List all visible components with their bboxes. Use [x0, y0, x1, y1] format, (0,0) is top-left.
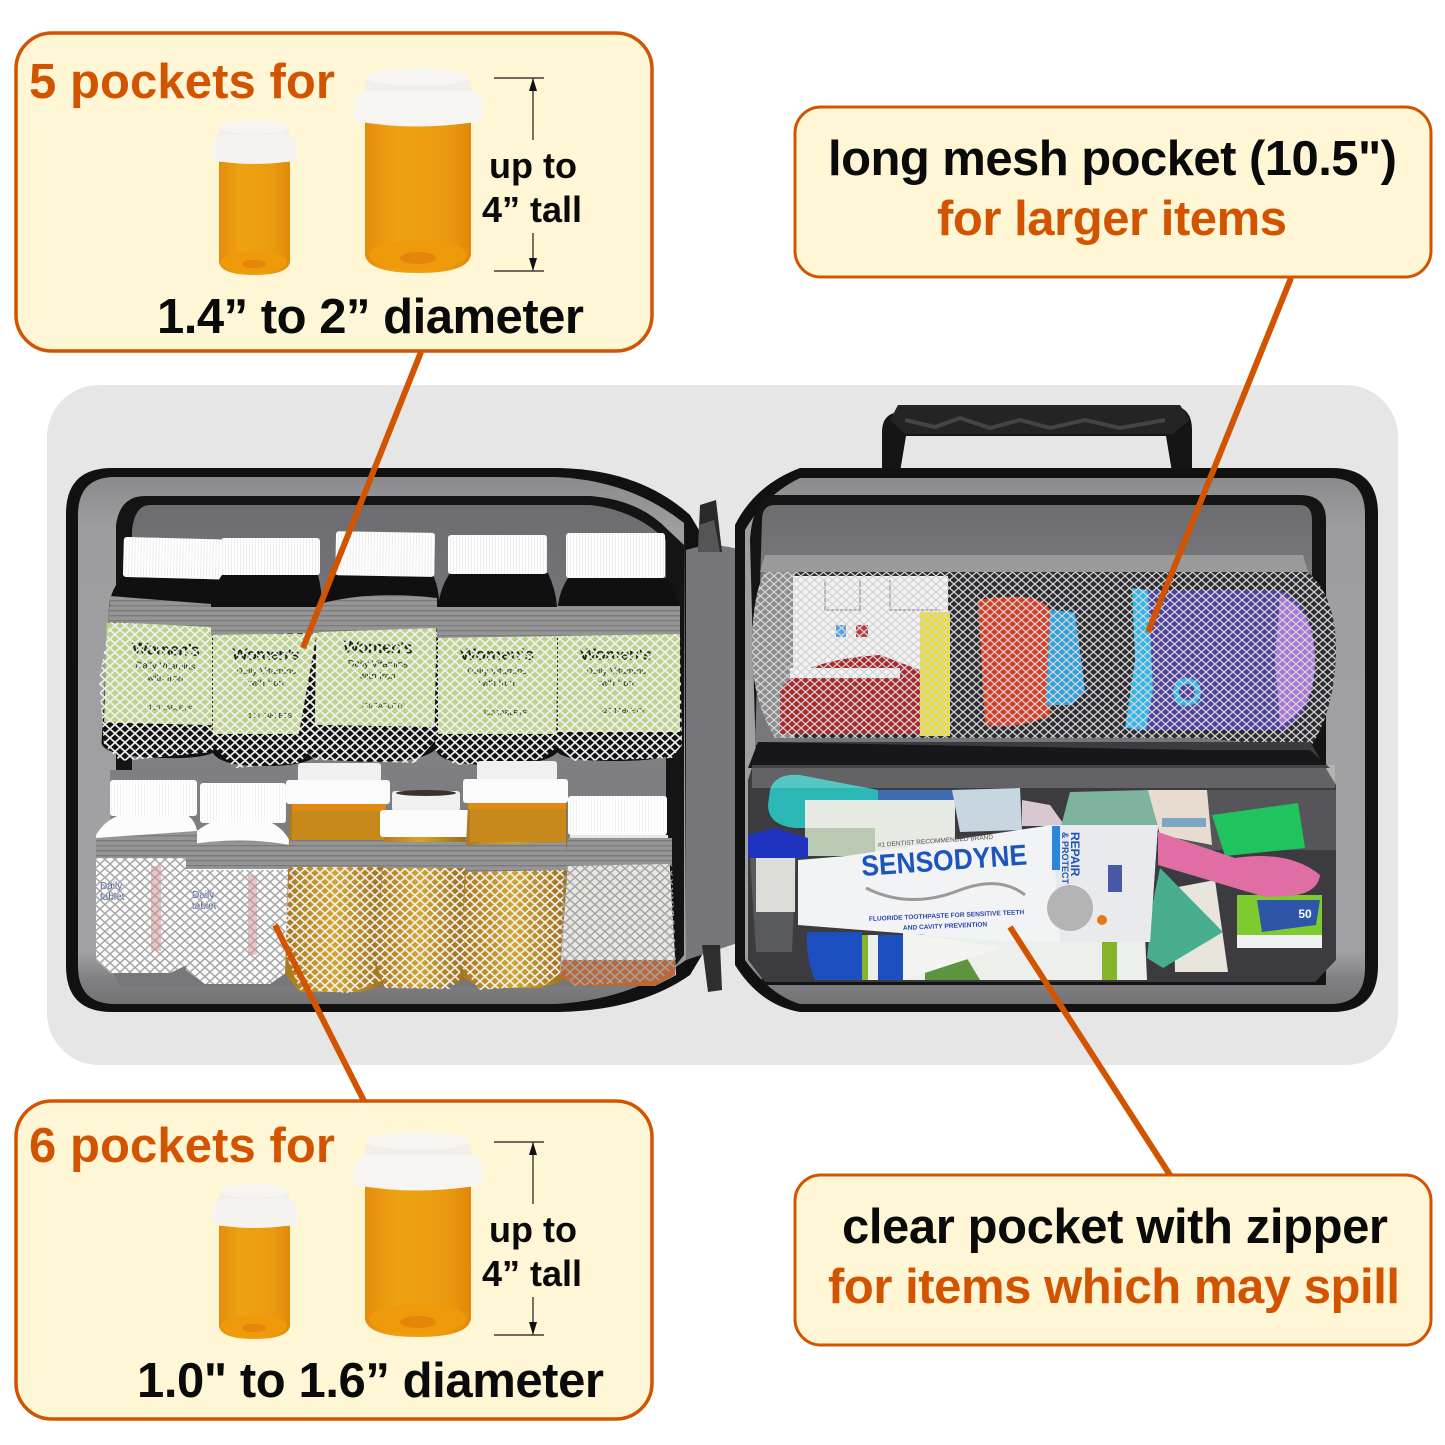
mesh overlay	[752, 566, 1336, 748]
white bottle 1	[96, 780, 197, 973]
blue band	[1046, 610, 1085, 705]
callout box	[16, 33, 652, 351]
vitamin bottle 3: Daily Vitamins	[348, 658, 408, 670]
right case outer shell	[735, 468, 1378, 1012]
vitamin bottle 5: Women's	[580, 645, 652, 664]
left case half	[66, 468, 702, 1012]
pill bottles	[211, 68, 483, 275]
red bottle upper	[978, 597, 1050, 726]
long mesh pocket	[752, 555, 1336, 748]
vitamin bottle 3	[296, 531, 442, 763]
heading: 6 pockets for	[29, 1119, 335, 1173]
clear zip pocket	[748, 742, 1336, 982]
mesh pocket band	[760, 555, 1308, 572]
callout box	[16, 1101, 652, 1419]
vitamin bottle 4	[436, 535, 559, 765]
small teal bottle	[1060, 790, 1158, 830]
sensodyne tube: & PROTECT	[1060, 832, 1070, 885]
grey backdrop panel	[47, 385, 1398, 1065]
pocket backing	[748, 742, 1336, 982]
sensodyne tube: AND CAVITY PREVENTION	[903, 921, 988, 932]
zipper	[748, 742, 1330, 768]
callout title: clear pocket with zipper	[842, 1200, 1388, 1254]
diameter label: 1.4” to 2” diameter	[157, 290, 584, 344]
white tube behind	[878, 790, 958, 802]
vitamin bottle 3: 120 TABLETS	[361, 703, 405, 710]
callout title: long mesh pocket (10.5")	[828, 132, 1397, 186]
blue tube	[860, 935, 1147, 980]
sensodyne tube: REPAIR	[1068, 832, 1082, 877]
blue floss holder	[750, 858, 796, 952]
leader line: mesh pocket	[1148, 278, 1291, 632]
vitamin bottle 5: 120 TABLETS	[600, 708, 644, 715]
bottom row elastic bands	[96, 831, 672, 872]
vitamin bottle 2: Daily Vitamins	[236, 666, 296, 677]
amber bottle 3	[460, 761, 568, 990]
vitamin bottle 4: Women's	[460, 645, 534, 664]
vitamin bottle 1	[101, 536, 225, 759]
height value: 4” tall	[482, 189, 582, 230]
leader line: clear pocket	[1010, 927, 1170, 1175]
floss box	[768, 775, 878, 828]
green-blue box	[1237, 895, 1322, 937]
sensodyne tube	[798, 825, 1158, 942]
sensodyne tube: FLUORIDE TOOTHPASTE FOR SENSITIVE TEETH	[869, 909, 1025, 923]
clear vinyl top edge	[752, 765, 1335, 788]
height label: up to	[489, 145, 577, 186]
vitamin bottle 2	[212, 538, 322, 766]
vitamin bottle 3: Women's	[343, 637, 413, 658]
height label: up to	[489, 1209, 577, 1250]
right lining	[755, 505, 1312, 745]
razor	[952, 788, 1022, 832]
vitamin bottle 1: 120 TABLETS	[148, 705, 193, 713]
right case half	[735, 405, 1378, 1012]
leader line: 5 pockets	[303, 352, 421, 648]
pink tool	[1158, 832, 1320, 897]
carry handle	[882, 405, 1192, 472]
clear zip pocket: 50	[1298, 907, 1312, 921]
callout box	[795, 107, 1431, 277]
white bottle 1: Daily	[100, 881, 122, 892]
vitamin bottle 5	[556, 533, 681, 761]
centre spine with zipper pulls	[686, 500, 747, 992]
sensodyne tube: #1 DENTIST RECOMMENDED BRAND	[878, 834, 994, 849]
vitamin bottle 3: with Iron	[358, 671, 396, 682]
sensodyne tube: SENSODYNE	[860, 839, 1028, 883]
callout: 5 pockets	[16, 33, 652, 351]
vitamin bottle 2: with Iron	[247, 678, 284, 689]
vitamin bottle 1: with Iron	[146, 673, 183, 684]
diameter label: 1.0" to 1.6” diameter	[137, 1354, 604, 1408]
pill bottles	[211, 1132, 483, 1339]
height value: 4” tall	[482, 1253, 582, 1294]
callout: long mesh pocket	[795, 107, 1431, 277]
white bottle 2: tablet	[192, 901, 217, 912]
amber bottle 1	[284, 763, 390, 993]
left case inner frame	[116, 496, 684, 985]
vitamin bottle 4: Daily Vitamins	[467, 666, 527, 677]
height dimension	[494, 78, 544, 271]
cyan strip	[1125, 588, 1153, 730]
mesh pocket background	[752, 566, 1336, 748]
white box item	[793, 576, 948, 676]
white bottle lower	[1173, 880, 1228, 972]
right case inner frame	[750, 495, 1326, 985]
vitamin bottle 2: Women's	[232, 645, 300, 664]
top row mesh pockets	[99, 595, 682, 768]
leader line: 6 pockets	[275, 925, 364, 1101]
vitamin bottle 1: Daily Vitamins	[135, 660, 196, 673]
purple bottle	[1130, 590, 1315, 730]
top row vitamin bottles	[99, 531, 682, 768]
amber bottle 2	[375, 790, 470, 989]
white bottle 2	[186, 783, 290, 984]
callout: 6 pockets	[16, 1101, 652, 1419]
vitamin bottle 4: with Iron	[478, 678, 515, 689]
vitamin bottle 4: 120 TABLETS	[483, 710, 527, 717]
yellow strip	[920, 612, 950, 736]
red bottle lower	[780, 655, 920, 734]
cream tube	[1148, 790, 1212, 845]
callout subtitle: for larger items	[937, 192, 1287, 246]
callout subtitle: for items which may spill	[828, 1260, 1400, 1314]
bottom row bottles	[96, 761, 676, 993]
left case outer shell	[66, 468, 702, 1012]
green box	[1212, 803, 1305, 856]
callout: clear pocket	[795, 1175, 1431, 1345]
vitamin bottle 5: Daily Vitamins	[586, 666, 646, 677]
height dimension	[494, 1142, 544, 1335]
white cap bottle	[560, 796, 676, 986]
vitamin bottle 1: Women's	[132, 639, 200, 660]
right case padded rim	[745, 478, 1365, 1004]
vitamin bottle 2: 120 TABLETS	[248, 713, 292, 720]
white bottle 1: tablet	[100, 892, 125, 903]
green tube	[1147, 868, 1223, 968]
callout box	[795, 1175, 1431, 1345]
vitamin bottle 5: with Iron	[597, 678, 634, 689]
white bottle 2: Daily	[192, 890, 214, 901]
heading: 5 pockets for	[29, 55, 335, 109]
left case padded rim	[78, 477, 686, 1004]
left case lining	[110, 505, 666, 987]
